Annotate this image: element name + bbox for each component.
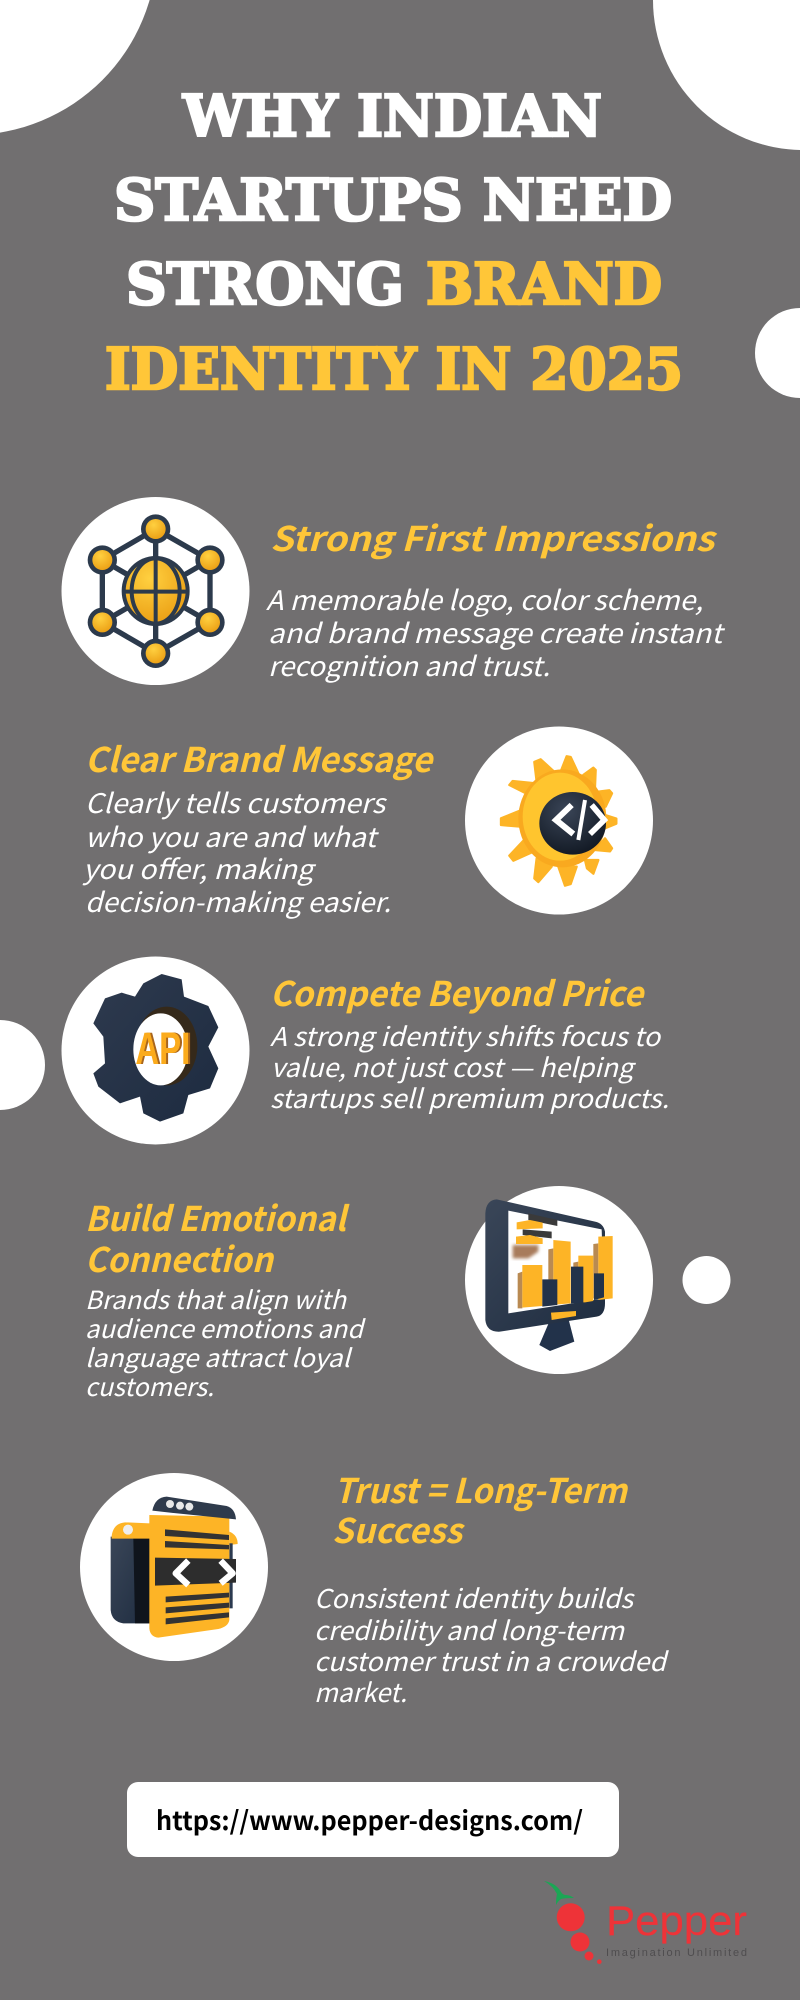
body text — [270, 1017, 669, 1116]
heading: Strong First Impressions — [270, 512, 717, 561]
heading — [332, 1464, 629, 1553]
icon: code gear — [465, 726, 653, 914]
icon: network globe — [62, 497, 250, 685]
body text: and brand message create instant — [268, 612, 726, 651]
decorative circle: top right — [653, 0, 800, 150]
logo: Pepper: Pepper — [606, 1897, 747, 1944]
icon: API gear — [62, 956, 250, 1144]
title: STRONG — [126, 251, 404, 318]
body text: credibility and long-term — [314, 1611, 625, 1648]
icon: API gear: API — [137, 1023, 192, 1074]
body text: who you are and what — [85, 816, 380, 855]
body text: Brands that align with — [85, 1281, 348, 1317]
body text: customer trust in a crowded — [314, 1642, 669, 1679]
logo: Pepper — [544, 1881, 747, 1964]
logo: Pepper: Imagination Unlimited — [606, 1947, 747, 1959]
heading: Build Emotional — [85, 1192, 350, 1241]
body text: language attract loyal — [85, 1339, 353, 1375]
heading — [85, 1192, 350, 1282]
panel: clear brand message — [82, 726, 653, 920]
heading: Connection — [85, 1233, 275, 1282]
body text: recognition and trust. — [268, 645, 550, 684]
body text: A strong identity shifts focus to — [270, 1017, 662, 1054]
body text: startups sell premium products. — [270, 1079, 669, 1116]
body text — [266, 579, 726, 684]
title: WHY INDIAN — [182, 83, 602, 150]
body text: Clearly tells customers — [85, 782, 388, 821]
icon: browser window — [80, 1473, 268, 1661]
decorative circle: top left — [0, 0, 157, 135]
body text — [85, 1281, 367, 1404]
panel: strong first impressions — [62, 497, 726, 685]
title: STARTUPS NEED — [114, 167, 672, 234]
icon: API gear: API — [135, 1023, 190, 1074]
body text — [314, 1579, 669, 1710]
body text: market. — [314, 1673, 407, 1710]
decorative circle: small right — [682, 1256, 730, 1304]
body text: customers. — [85, 1368, 214, 1404]
title — [105, 83, 683, 403]
body text: A memorable logo, color scheme, — [266, 579, 703, 618]
URL button: https://www.pepper-designs.com/ — [156, 1801, 583, 1838]
heading: Success — [332, 1504, 465, 1553]
body text: you offer, making — [82, 848, 317, 887]
URL button — [127, 1782, 619, 1857]
panel: compete beyond price — [62, 956, 669, 1144]
body text: audience emotions and — [85, 1310, 367, 1346]
panel: build emotional connection — [85, 1186, 653, 1404]
heading: Compete Beyond Price — [270, 967, 646, 1016]
icon: monitor bar chart — [465, 1186, 653, 1374]
body text — [82, 782, 391, 920]
decorative circle: right edge — [755, 308, 800, 398]
heading: Clear Brand Message — [85, 733, 435, 782]
title: BRAND — [426, 251, 662, 318]
heading: Trust = Long-Term — [334, 1464, 629, 1513]
body text: value, not just cost — helping — [271, 1048, 636, 1085]
decorative circle: left edge — [0, 1020, 45, 1110]
body text: Consistent identity builds — [314, 1579, 636, 1616]
title: IDENTITY IN 2025 — [105, 336, 683, 403]
panel: trust equals long-term success — [80, 1464, 669, 1710]
body text: decision-making easier. — [85, 881, 391, 920]
